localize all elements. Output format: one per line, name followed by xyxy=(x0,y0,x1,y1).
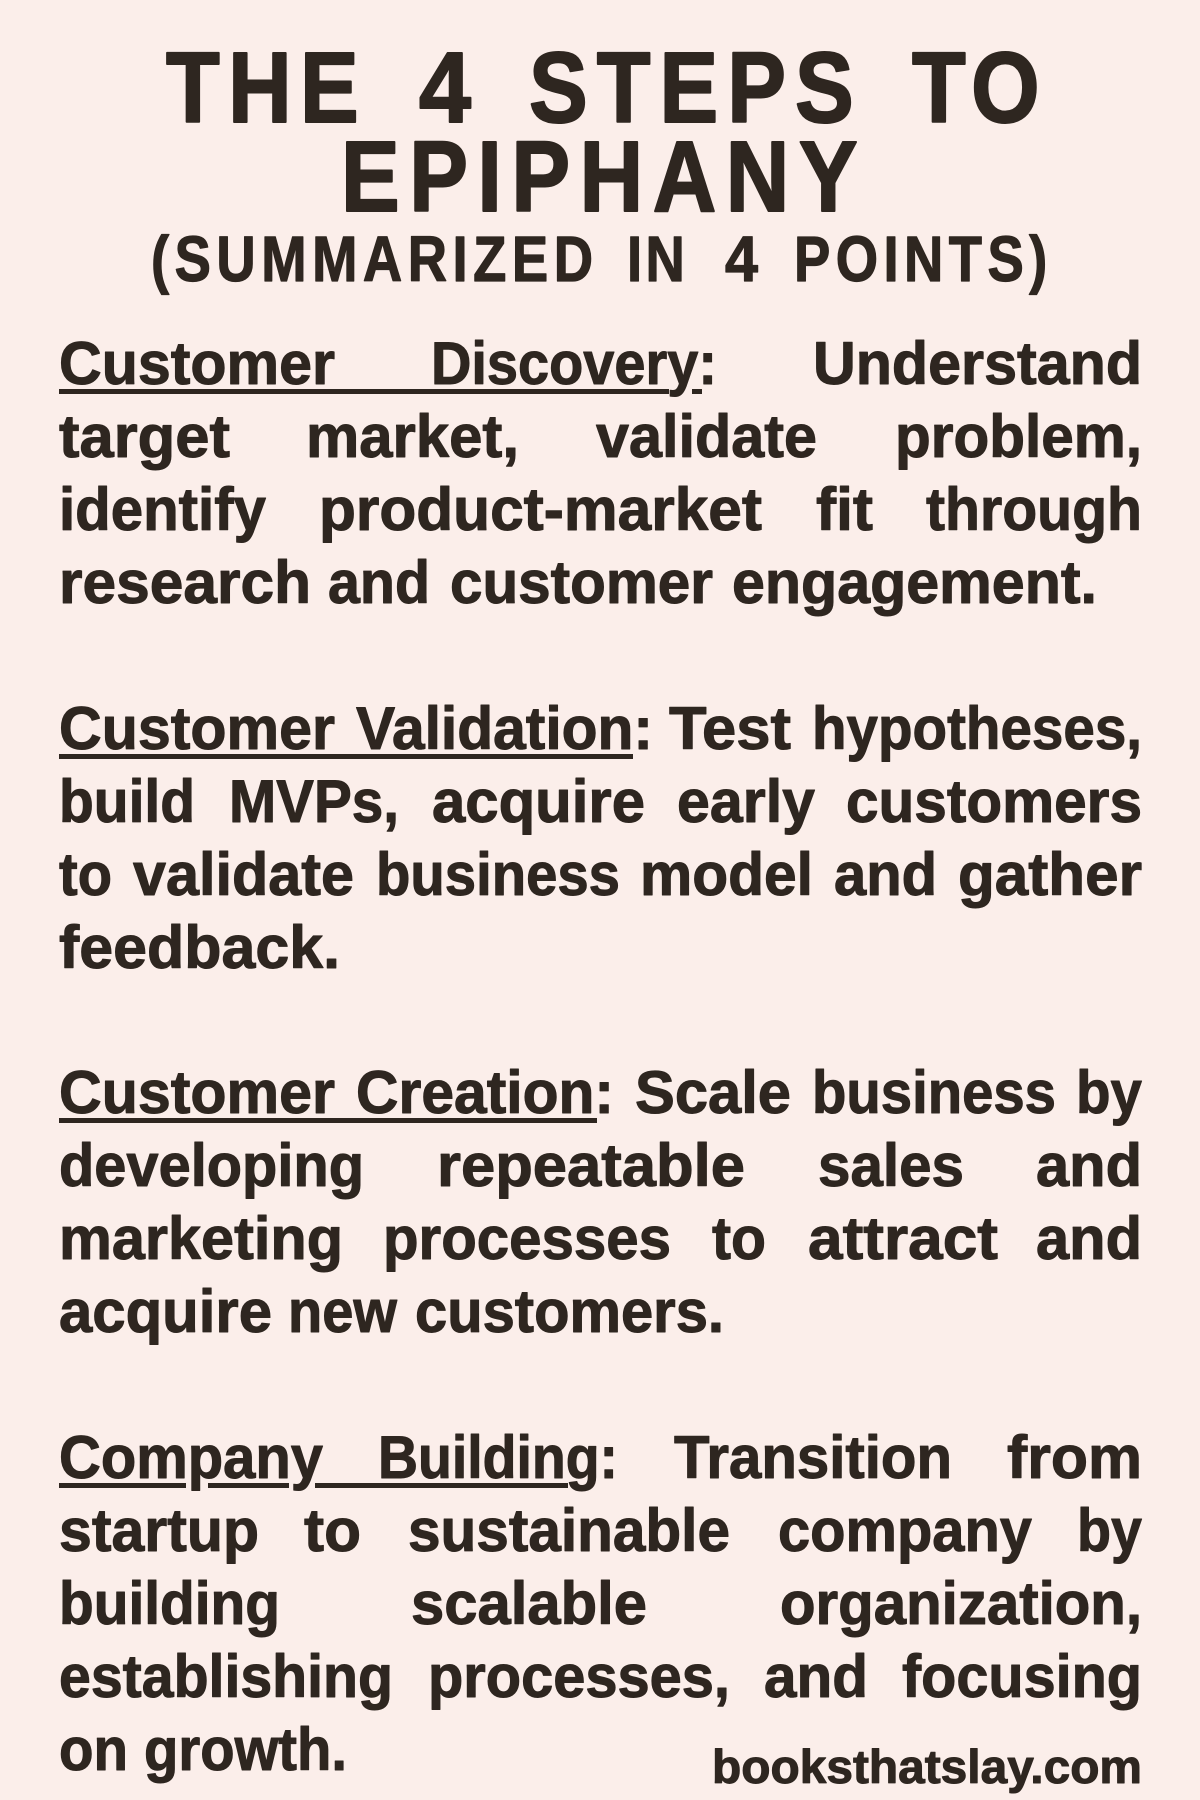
text block: customer creation: marketing xyxy=(59,1205,343,1272)
text block: customer validation: Test xyxy=(669,695,791,762)
text block: company building: Building: xyxy=(378,1424,618,1491)
text block: customer creation: and xyxy=(1036,1205,1142,1272)
text block: customer validation: and xyxy=(834,841,937,908)
text block: customer creation: processes xyxy=(383,1205,671,1272)
text block: company building: scalable xyxy=(411,1570,647,1637)
text block: company building: from xyxy=(1007,1424,1142,1491)
text block: company building: to xyxy=(304,1497,361,1564)
subtitle: (SUMMARIZED xyxy=(151,223,593,295)
website credit: booksthatslay.com xyxy=(712,1740,1142,1793)
text block: customer creation: acquire xyxy=(59,1278,272,1345)
text block: customer creation: repeatable xyxy=(437,1132,745,1199)
text block: customer creation: sales xyxy=(818,1132,964,1199)
text block: customer discovery: problem, xyxy=(895,403,1142,470)
text block: customer validation: acquire xyxy=(432,768,645,835)
text block: customer creation: attract xyxy=(808,1205,998,1272)
text block: customer validation: business xyxy=(376,841,620,908)
text block: company building: sustainable xyxy=(408,1497,730,1564)
text block: customer discovery xyxy=(59,330,1142,616)
text block: company building: Transition xyxy=(674,1424,952,1491)
text block: company building: and xyxy=(764,1643,868,1710)
text block: company building: building xyxy=(59,1570,280,1637)
text block: customer validation: Customer xyxy=(59,695,335,762)
title: THE xyxy=(166,32,359,143)
text block: customer discovery: identify xyxy=(59,476,267,543)
text block: customer creation xyxy=(59,1059,1143,1345)
text block: customer creation: Scale xyxy=(635,1059,791,1126)
text block: customer discovery: and xyxy=(328,549,430,616)
text block: customer discovery: customer xyxy=(450,549,713,616)
text block: customer validation: validate xyxy=(133,841,354,908)
text block: customer creation: Customer xyxy=(59,1059,335,1126)
text block: company building: on xyxy=(59,1716,128,1783)
text block: customer discovery: Discovery: xyxy=(431,330,717,397)
text block: customer validation: gather xyxy=(958,841,1142,908)
text block: customer discovery: product-market xyxy=(319,476,762,543)
text block: company building: establishing xyxy=(59,1643,393,1710)
text block: company building: processes, xyxy=(428,1643,730,1710)
text block: company building: startup xyxy=(59,1497,259,1564)
text block: customer validation xyxy=(59,695,1142,981)
text block: customer creation: business xyxy=(812,1059,1056,1126)
text block: company building: growth. xyxy=(144,1716,347,1783)
text block: customer validation: feedback. xyxy=(59,914,340,981)
text block: customer discovery: target xyxy=(59,403,230,470)
text block: customer validation: model xyxy=(640,841,813,908)
text block: customer creation: new xyxy=(288,1278,397,1345)
subtitle: 4 xyxy=(725,223,758,295)
subtitle: IN xyxy=(627,223,685,295)
title: STEPS xyxy=(529,32,854,143)
text block: customer validation: Validation: xyxy=(356,695,653,762)
text block: customer discovery: fit xyxy=(816,476,873,543)
title: 4 xyxy=(419,32,471,144)
text block: company building: focusing xyxy=(902,1643,1142,1710)
text block: customer validation: build xyxy=(59,768,195,835)
title: EPIPHANY xyxy=(341,121,858,232)
text block: customer discovery: through xyxy=(926,476,1142,543)
text block: company building: company xyxy=(778,1497,1033,1564)
text block: customer validation: hypotheses, xyxy=(812,695,1142,762)
title: TO xyxy=(912,32,1040,143)
text block: company building xyxy=(59,1424,1143,1783)
text block: customer discovery: Customer xyxy=(59,330,335,397)
text block: customer creation: developing xyxy=(59,1132,364,1199)
title xyxy=(166,32,1040,232)
text block: customer discovery: market, xyxy=(306,403,519,470)
text block: customer creation: by xyxy=(1076,1059,1143,1126)
text block: customer validation: early xyxy=(677,768,816,835)
text block: customer validation: customers xyxy=(846,768,1142,835)
text block: company building: by xyxy=(1077,1497,1143,1564)
text block: customer creation: Creation: xyxy=(356,1059,614,1126)
text block: customer validation: to xyxy=(59,841,112,908)
text block: company building: organization, xyxy=(780,1570,1142,1637)
text block: company building: Company xyxy=(59,1424,324,1491)
text block: customer validation: MVPs, xyxy=(229,768,399,835)
text block: customer creation: customers. xyxy=(415,1278,724,1345)
text block: customer discovery: validate xyxy=(596,403,817,470)
text block: customer discovery: engagement. xyxy=(732,549,1097,616)
text block: customer discovery: Understand xyxy=(813,330,1142,397)
subtitle xyxy=(151,223,1047,295)
subtitle: POINTS) xyxy=(794,223,1047,295)
text block: customer creation: and xyxy=(1036,1132,1142,1199)
text block: customer creation: to xyxy=(712,1205,766,1272)
text block: customer discovery: research xyxy=(59,549,311,616)
